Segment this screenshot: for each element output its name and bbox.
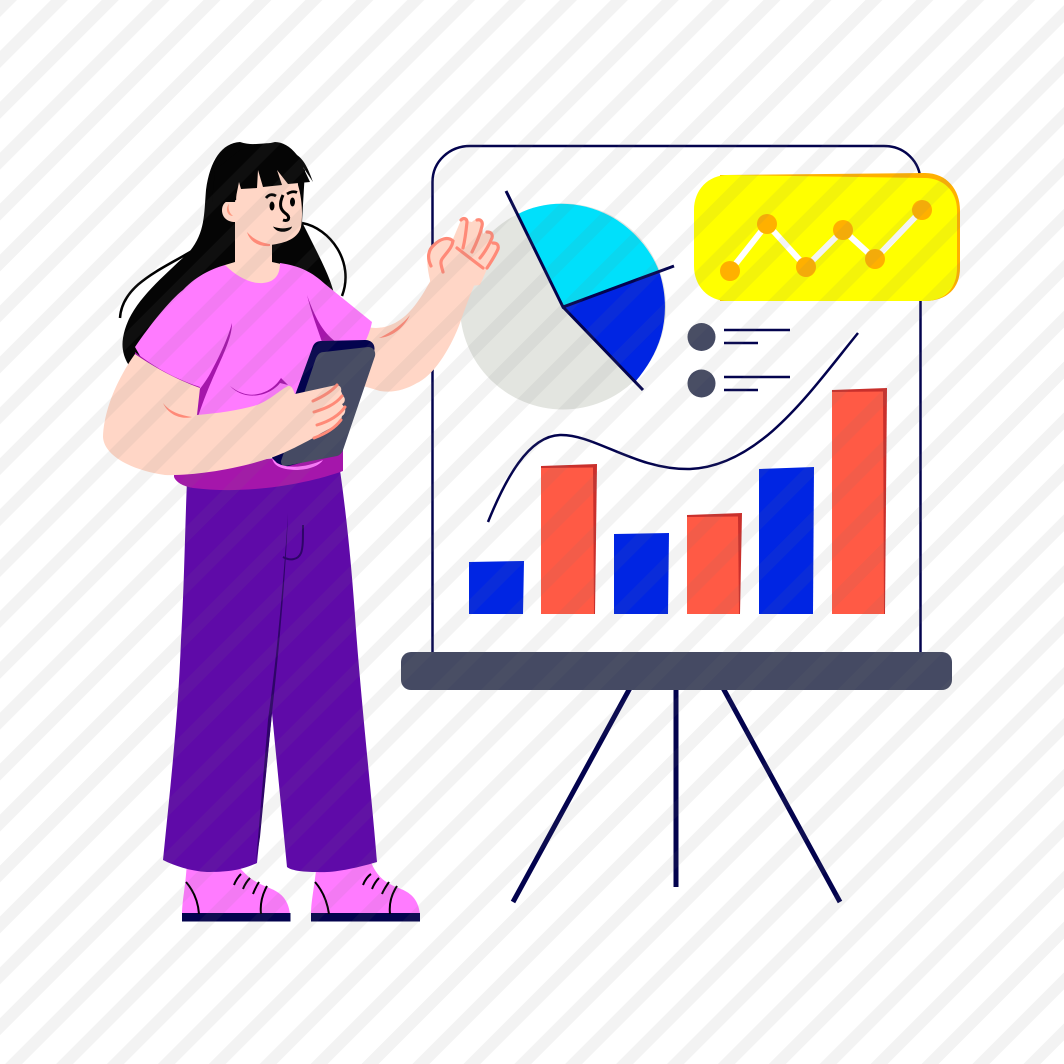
- finger 1: [461, 219, 467, 248]
- right shoe: [311, 860, 420, 922]
- cyan slice: [518, 204, 659, 307]
- pie chart: [460, 191, 674, 410]
- finger outlines: [313, 385, 345, 438]
- tablet: [272, 340, 375, 470]
- elbow crease: [163, 403, 192, 418]
- board frame: [432, 146, 920, 652]
- neck: [225, 200, 281, 285]
- pants crease: [256, 513, 288, 862]
- sparkline: [730, 210, 922, 271]
- presentation board: [401, 146, 952, 902]
- torso fold right: [307, 295, 336, 342]
- pants pocket: [283, 525, 303, 559]
- hair back: [122, 142, 335, 367]
- blue bar 1: [469, 561, 524, 614]
- forearm: [360, 268, 482, 392]
- finger 3: [480, 232, 492, 258]
- arm crease: [379, 315, 410, 338]
- pants: [163, 470, 377, 872]
- legend item 1: [688, 323, 790, 351]
- red bar 4: [687, 513, 742, 614]
- bar chart: [469, 388, 887, 614]
- palm: [427, 218, 499, 290]
- tablet back: [272, 340, 375, 467]
- blue bar 5: [759, 467, 814, 614]
- palm crease: [457, 248, 483, 268]
- sleeve shadow: [135, 352, 200, 390]
- board tray: [401, 652, 952, 690]
- sparkline points: [720, 200, 932, 281]
- fingers outline: [429, 219, 498, 272]
- nose: [281, 195, 289, 220]
- red bar 2: [541, 464, 597, 614]
- card back edge: [720, 173, 960, 301]
- legend: [688, 323, 790, 398]
- raised arm and hand: [360, 218, 499, 392]
- thumb outline: [429, 238, 453, 272]
- pie dividers: [506, 191, 674, 390]
- tablet screen: [281, 347, 375, 466]
- blue bar 3: [614, 533, 669, 614]
- shirt: [135, 263, 372, 455]
- shirt hem: [174, 450, 343, 490]
- trend curve: [488, 333, 858, 522]
- card face: [694, 175, 957, 301]
- neck shadow: [247, 232, 270, 246]
- fringe: [212, 142, 313, 202]
- finger 2: [472, 220, 482, 252]
- blue slice: [563, 271, 665, 382]
- shirt peek under tablet: [272, 458, 323, 470]
- pie base: [460, 204, 666, 410]
- smile: [273, 226, 292, 232]
- red bar 6: [832, 388, 887, 614]
- eyes and brows: [266, 192, 297, 210]
- chest curve: [230, 378, 288, 396]
- board legs: [513, 688, 840, 902]
- left shoe: [182, 860, 290, 922]
- ear: [222, 201, 235, 222]
- yellow sparkline card: [694, 173, 960, 301]
- face: [236, 165, 302, 245]
- woman presenter: [103, 142, 499, 922]
- hair strands: [120, 223, 346, 318]
- finger 4: [487, 243, 498, 268]
- legend item 2: [688, 370, 790, 398]
- torso fold left: [180, 323, 232, 420]
- left arm and holding hand: [103, 354, 345, 475]
